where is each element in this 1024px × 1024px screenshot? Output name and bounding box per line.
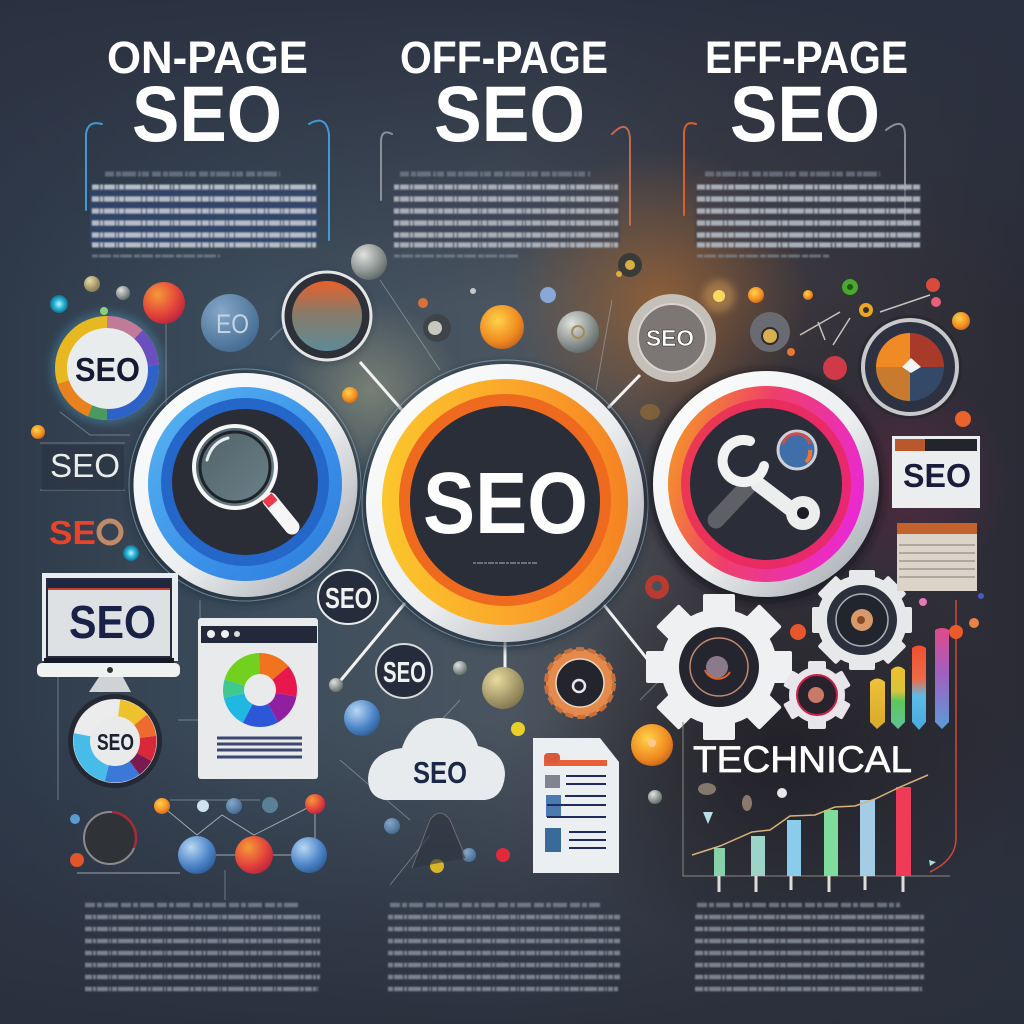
heading: eff-page seo: EFF-PAGE	[705, 32, 908, 83]
icon: radar dial	[858, 315, 962, 419]
sphere cluster upper center	[418, 253, 642, 353]
chart frame	[683, 600, 956, 876]
icon: chart marks	[648, 783, 936, 866]
badge: seo circle one	[318, 570, 378, 624]
network: lower left nodes	[70, 794, 327, 874]
gear: small pink	[783, 661, 851, 729]
chart: color wheel	[234, 664, 286, 716]
icon: magnifying glass	[194, 426, 292, 527]
badge: seo circle two: SEO	[383, 657, 426, 689]
icon: monitor	[37, 573, 180, 692]
icon: seo donut: SEO	[75, 351, 140, 388]
sphere cluster upper right	[640, 278, 971, 427]
gear: small orange	[546, 649, 614, 717]
badge: grey seo	[628, 294, 716, 382]
column brackets	[86, 121, 905, 240]
label: colored seo	[49, 514, 121, 551]
text block: bottom center	[388, 905, 620, 989]
label: colored seo: SE	[49, 514, 96, 551]
card: seo tag: SEO	[903, 457, 971, 494]
label: seo chip dark: SEO	[50, 447, 120, 484]
gear: upper right	[812, 570, 912, 670]
heading: eff-page seo: SEO	[730, 69, 880, 158]
badge: grey seo: SEO	[646, 325, 694, 351]
gear: large white	[646, 594, 792, 740]
ring: technical tools	[649, 370, 883, 604]
text block: bottom left	[85, 905, 320, 989]
chart: technical bars with trend line	[692, 775, 928, 892]
icon: wrench	[716, 440, 820, 530]
heading: eff-page seo	[705, 32, 908, 158]
card: mini report	[897, 523, 977, 591]
decorative nodes lower center	[329, 661, 525, 873]
badge: seo circle two	[376, 644, 432, 698]
heading: on-page seo: ON-PAGE	[107, 32, 308, 83]
chart: seo donut lower left	[68, 694, 162, 788]
sphere: blue seo: EO	[216, 309, 249, 339]
heading: off-page seo: OFF-PAGE	[400, 32, 608, 83]
sparks right of gears	[645, 575, 984, 640]
text block: eff-page description	[695, 174, 921, 256]
column headings	[107, 32, 908, 158]
sphere: orange	[631, 724, 673, 766]
icon: document	[533, 738, 619, 873]
connector lines	[40, 280, 680, 900]
badge: seo circle one: SEO	[325, 583, 372, 615]
card: seo tag	[892, 436, 980, 508]
icon: cloud seo	[368, 718, 505, 800]
text block: on-page description	[90, 174, 318, 256]
icon: seo donut	[50, 311, 164, 425]
heading: on-page seo	[107, 32, 308, 158]
heading: off-page seo: SEO	[434, 69, 585, 158]
heading: off-page seo	[400, 32, 608, 158]
text block: off-page description	[392, 174, 620, 256]
text block: bottom right	[695, 905, 925, 989]
chart: colored bars	[870, 628, 949, 730]
icon: browser window	[198, 618, 318, 779]
sphere: blue seo	[201, 294, 259, 352]
icon: lens badge	[283, 272, 371, 362]
decorative spheres upper left	[31, 244, 387, 561]
icon: small lens	[778, 431, 816, 469]
label: technical: TECHNICAL	[693, 739, 912, 780]
ring: off-page seo	[362, 360, 648, 649]
label: seo chip dark	[42, 445, 124, 490]
label: center seo: SEO	[423, 455, 588, 552]
heading: on-page seo: SEO	[132, 69, 282, 158]
chart: seo donut lower left: SEO	[97, 729, 134, 755]
ring: on-page magnifier	[129, 369, 361, 604]
icon: monitor: SEO	[69, 596, 156, 648]
icon: cloud seo: SEO	[413, 755, 467, 790]
